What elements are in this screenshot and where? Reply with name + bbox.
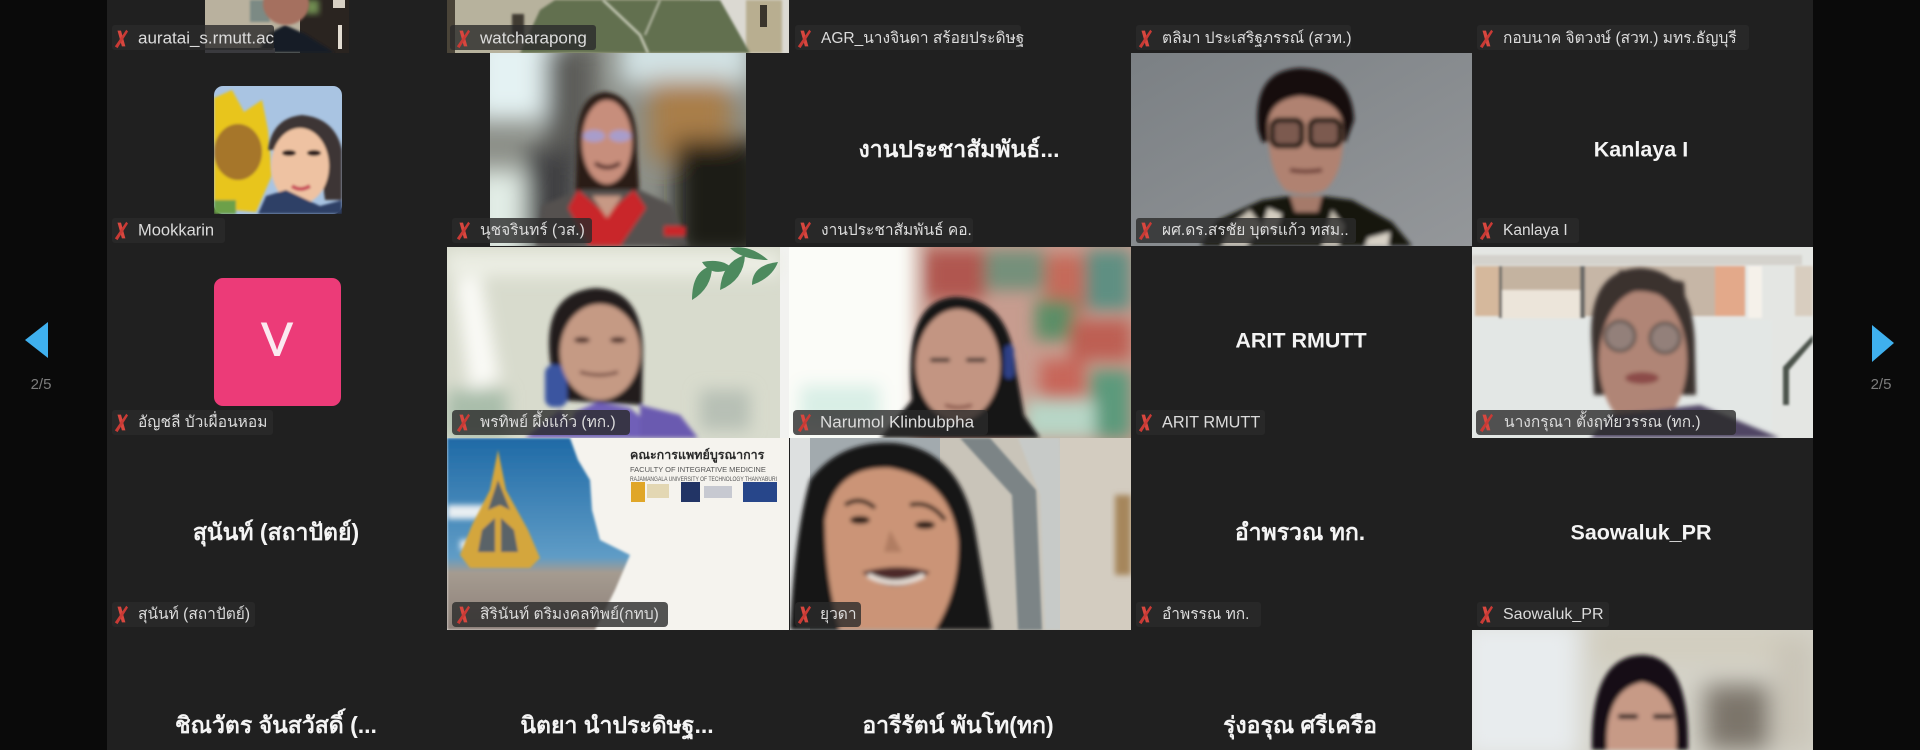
- name: Saowaluk: Saowaluk_PR: [1570, 521, 1712, 545]
- tag: auratai: auratai_s.rmutt.ac: [138, 28, 275, 47]
- name: ARIT RMUTT: ARIT RMUTT: [1235, 329, 1367, 353]
- avatar: V: [214, 278, 341, 406]
- gold emblem: [460, 450, 540, 568]
- portrait: [525, 288, 698, 438]
- tile video: Girl bottom right: [1472, 630, 1813, 750]
- tile video: Karuna: [1472, 247, 1813, 438]
- sunflower: [214, 90, 272, 214]
- tag: PR office: งานประชาสัมพันธ์ คอ.: [821, 221, 972, 239]
- left sidebar: [0, 0, 107, 750]
- portrait: [536, 92, 688, 246]
- name: PR office: งานประชาสัมพันธ์...: [858, 136, 1060, 162]
- tag: Salima: ตลิมา ประเสริฐภรรณ์ (สวท.): [1162, 29, 1351, 47]
- tag: Amporn: อำพรรณ ทก.: [1162, 606, 1249, 623]
- tag: Nuchjarin: นุชจรินทร์ (วส.): [480, 221, 585, 240]
- name: Rungarun: รุ่งอรุณ ศรีเครือ: [1223, 712, 1377, 740]
- tile video: Nuchjarin: [490, 53, 746, 246]
- tag: Nuchjarin: [452, 218, 592, 243]
- page indicator left: 2/5: [31, 376, 51, 393]
- tag: ARIT: [1136, 410, 1265, 435]
- window: [1472, 255, 1813, 438]
- tag: Sirinan: สิรินันท์ ตริมงคลทิพย์(กทบ): [480, 605, 659, 623]
- leaves: [692, 247, 778, 300]
- avatar: Mookkarin: [214, 86, 342, 214]
- tag: ARIT: ARIT RMUTT: [1162, 413, 1260, 431]
- tag: AGR: AGR_นางจินดา สร้อยประดิษฐ: [821, 30, 1024, 47]
- tag: Sirinan: [452, 602, 668, 627]
- faculty heading: [630, 447, 777, 483]
- tag: Pornthip: [452, 410, 630, 435]
- tile video: Sorachai: [1131, 53, 1472, 246]
- page indicator right: 2/5: [1871, 376, 1891, 393]
- portrait: [880, 297, 1040, 438]
- tag: AGR: [795, 25, 1024, 50]
- tile video: Yuwada: [790, 438, 1131, 630]
- tile video: watcharapong: [447, 0, 789, 53]
- tag: Anchalee: อัญชลี บัวเผื่อนหอม: [138, 411, 267, 431]
- tag: Saowaluk: [1477, 602, 1609, 627]
- faculty heading: FACULTY OF INTEGRATIVE MEDICINE: [630, 465, 766, 474]
- tag: Karuna: [1476, 410, 1736, 435]
- name: Sunan: สุนันท์ (สถาปัตย์): [193, 519, 359, 547]
- tag: Anchalee: [112, 410, 273, 435]
- tag: Sorachai: ผศ.ดร.สรชัย บุตรแก้ว ทสม..: [1162, 222, 1349, 240]
- tag: Saowaluk: Saowaluk_PR: [1503, 606, 1604, 623]
- tag: Sunan: สุนันท์ (สถาปัตย์): [138, 605, 250, 624]
- arrow: next page: [1872, 325, 1894, 362]
- tag: Kobnak: [1477, 25, 1749, 50]
- tag: Mookkarin: [112, 218, 225, 243]
- tag: watcharapong: watcharapong: [479, 28, 587, 47]
- sky photo: [447, 438, 630, 630]
- name: Amporn: อำพรวณ ทก.: [1235, 519, 1365, 545]
- tag: Narumol: [793, 410, 988, 435]
- tag: Pornthip: พรทิพย์ ผึ้งแก้ว (ทก.): [480, 410, 616, 431]
- name tags: [112, 25, 1749, 627]
- tile video: Pornthip: [447, 247, 789, 438]
- tag: Karuna: นางกรุณา ตั้งฤทัยวรรณ (ทก.): [1504, 410, 1701, 432]
- tag: Amporn: [1136, 602, 1261, 627]
- tag: watcharapong: [450, 25, 596, 50]
- portrait: [258, 115, 342, 214]
- name: Nittaya: นิตยา นำประดิษฐ...: [520, 712, 714, 740]
- portrait: [1200, 68, 1412, 246]
- tile video: auratai: [205, 0, 349, 53]
- portrait: [1590, 268, 1780, 438]
- tag: Sorachai: [1136, 218, 1356, 243]
- portrait: [1592, 655, 1688, 750]
- tag: Narumol: Narumol Klinbubpha: [820, 412, 975, 431]
- tag: PR office: [795, 218, 973, 243]
- portrait: [790, 443, 992, 630]
- tile video: Narumol: [789, 247, 1131, 438]
- right sidebar: [1813, 0, 1920, 750]
- name: Chinnawat: ชิณวัตร จันสวัสดิ์ (...: [175, 708, 377, 738]
- tag: Kanlaya: [1477, 218, 1579, 243]
- tag: Sunan: [112, 602, 255, 627]
- tag: auratai: [112, 25, 275, 50]
- tag: Yuwada: [795, 602, 861, 627]
- tag: Yuwada: ยุวดา: [820, 606, 857, 624]
- tile: faculty logo share: [447, 438, 789, 630]
- tag: Mookkarin: Mookkarin: [138, 221, 214, 239]
- tag: Kanlaya: Kanlaya I: [1503, 222, 1568, 239]
- avatar: V: V: [261, 312, 293, 365]
- arrow: previous page: [25, 322, 48, 358]
- name: Areerat: อารีรัตน์ พันโท(ทก): [862, 711, 1054, 738]
- faculty heading: คณะการแพทย์บูรณาการ: [630, 447, 765, 463]
- name: Kanlaya I: Kanlaya I: [1594, 138, 1688, 162]
- display names: [175, 136, 1712, 740]
- tag: Kobnak: กอบนาค จิตวงษ์ (สวท.) มทร.ธัญบุรี: [1503, 29, 1737, 48]
- partner logos: [631, 482, 777, 502]
- tag: Salima: [1136, 25, 1351, 50]
